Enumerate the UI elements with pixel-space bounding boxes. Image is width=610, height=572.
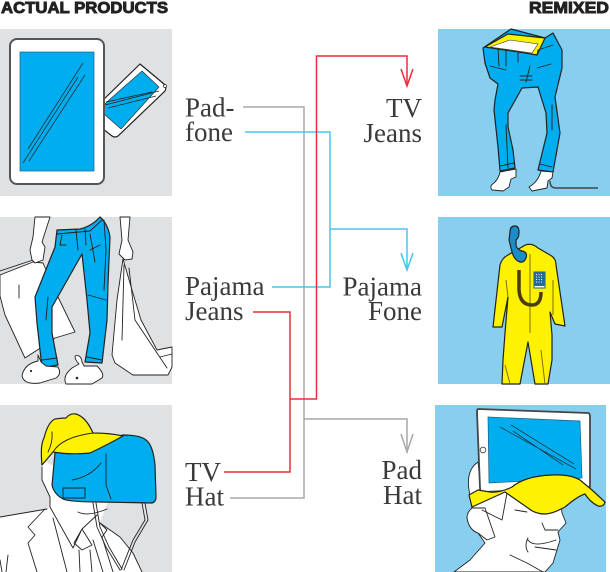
label: pajama fone: Pajama bbox=[343, 272, 422, 302]
label: padfone: Pad- bbox=[185, 92, 234, 122]
connector: padfone to remixed (gray) bbox=[230, 107, 413, 498]
icon: yellow cap bbox=[41, 414, 123, 465]
panel: tv jeans illustration bbox=[438, 29, 610, 196]
icon: power cable bbox=[550, 181, 598, 188]
icon: yellow cap brim bbox=[469, 475, 605, 514]
label: pajama fone: Fone bbox=[368, 296, 422, 326]
icon: man in suit bbox=[0, 460, 148, 572]
icon: tablet bbox=[10, 39, 104, 184]
icon: right arm bbox=[119, 217, 133, 260]
arrow: pad hat bbox=[401, 434, 413, 452]
arrow: tv jeans bbox=[401, 69, 413, 86]
icon: cord bbox=[519, 270, 541, 305]
icon: keypad bbox=[534, 272, 545, 288]
arrow: pajama fone bbox=[401, 253, 413, 270]
label: pajama jeans: Jeans bbox=[185, 296, 243, 326]
label: tv jeans: Jeans bbox=[364, 118, 422, 148]
panel: pajama jeans illustration bbox=[0, 217, 172, 384]
icon: tv on face bbox=[52, 435, 156, 503]
connector: tv jeans (red) bbox=[224, 56, 413, 472]
icon: yellow coverall bbox=[493, 244, 565, 384]
panel: pajama fone illustration bbox=[438, 217, 610, 384]
icon: pillow bbox=[0, 262, 75, 358]
heading: actual products: ACTUAL PRODUCTS bbox=[1, 0, 168, 17]
icon: phone bbox=[98, 64, 166, 137]
label: tv jeans: TV bbox=[386, 93, 422, 123]
icon: left bunny slipper bbox=[22, 355, 60, 383]
icon: high heels bbox=[491, 169, 553, 191]
icon: tablet on cap bbox=[477, 409, 590, 492]
icon: blanket bbox=[112, 259, 172, 375]
icon: jeans bbox=[35, 217, 110, 368]
label: pad hat: Hat bbox=[383, 480, 422, 510]
panel: pad hat illustration bbox=[435, 405, 606, 572]
connector: pajama fone (blue) bbox=[245, 132, 413, 287]
icon: telephone handset bbox=[509, 226, 526, 262]
panel: tv hat illustration bbox=[0, 405, 172, 572]
panel: padfone illustration bbox=[0, 29, 172, 196]
icon: right bunny slipper bbox=[65, 356, 103, 384]
heading: remixed: REMIXED bbox=[529, 0, 609, 17]
icon: man's head bbox=[454, 462, 566, 572]
label: tv hat: TV bbox=[185, 457, 221, 487]
label: pad hat: Pad bbox=[382, 455, 422, 485]
label: padfone: fone bbox=[185, 117, 233, 147]
icon: jeans with tv waist bbox=[483, 29, 562, 172]
label: tv hat: Hat bbox=[185, 482, 224, 512]
icon: left arm bbox=[30, 217, 50, 263]
label: pajama jeans: Pajama bbox=[185, 271, 264, 301]
